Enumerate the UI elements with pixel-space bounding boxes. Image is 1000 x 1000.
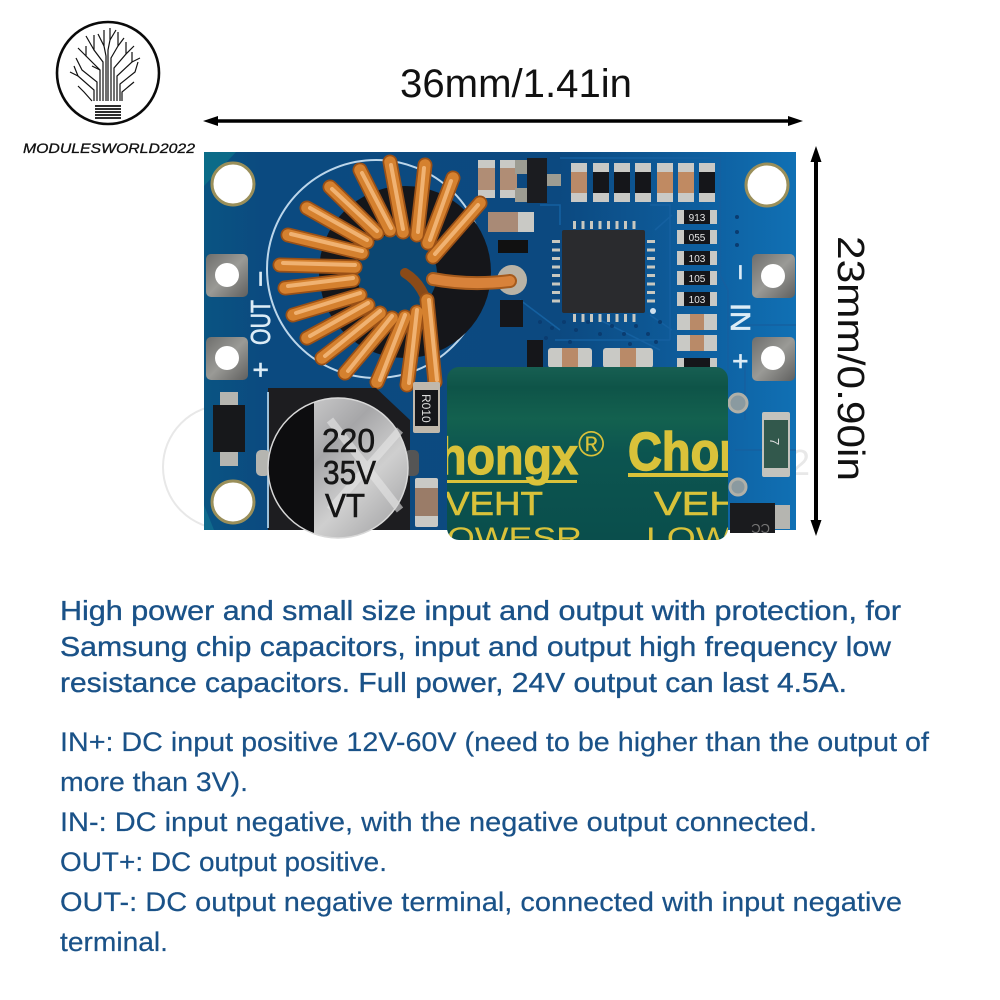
- pin descriptions: more than 3V).: [60, 767, 248, 797]
- top row components: [478, 158, 715, 253]
- R010 resistor: [413, 382, 440, 433]
- silkscreen labels: −: [245, 271, 276, 287]
- fuse: [762, 412, 790, 477]
- lower capacitors: [500, 300, 717, 368]
- silkscreen labels: −: [725, 264, 756, 280]
- traces: [520, 157, 796, 450]
- capacitor printing: VEH: [654, 485, 739, 522]
- controller chip: [556, 225, 656, 318]
- copper windings: [280, 162, 480, 385]
- resistor column: 913: [689, 213, 706, 224]
- capacitor markings: [322, 422, 376, 524]
- output capacitor base: [268, 388, 410, 530]
- small chip capacitor: [415, 478, 438, 527]
- resistor column: 103: [689, 295, 706, 306]
- circuit board photo: [204, 152, 796, 555]
- fuse: 7: [767, 438, 782, 445]
- dimension: width: [203, 62, 803, 126]
- capacitor markings: 220: [322, 422, 375, 459]
- pin descriptions: [60, 727, 930, 957]
- height arrow: [814, 158, 818, 524]
- resistor column: [677, 210, 717, 351]
- capacitor printing: LOW: [646, 522, 732, 555]
- pin descriptions: OUT-: DC output negative terminal, connected with input negative: [60, 887, 902, 917]
- pin descriptions: IN-: DC input negative, with the negative output connected.: [60, 807, 817, 837]
- diode left: [213, 392, 245, 466]
- description paragraph: Samsung chip capacitors, input and output high frequency low: [60, 631, 891, 662]
- width arrow: [216, 119, 790, 123]
- diode right: CC: [751, 521, 770, 536]
- silkscreen labels: +: [245, 362, 276, 378]
- silkscreen labels: OUT: [245, 300, 276, 345]
- resistor column: 103: [689, 254, 706, 265]
- pin descriptions: IN+: DC input positive 12V-60V (need to be higher than the output of: [60, 727, 930, 757]
- toroidal inductor: [280, 162, 527, 385]
- silkscreen labels: IN: [725, 303, 756, 332]
- description paragraph: [60, 595, 901, 698]
- wire lead: [405, 265, 527, 315]
- capacitor printing: [447, 430, 728, 540]
- R010 resistor: R010: [419, 394, 433, 423]
- silkscreen labels: +: [725, 353, 756, 369]
- input pads: [752, 254, 795, 381]
- watermark: 22: [770, 442, 810, 483]
- capacitor printing: Chon: [628, 422, 748, 482]
- pin descriptions: terminal.: [60, 927, 168, 957]
- pin descriptions: OUT+: DC output positive.: [60, 847, 387, 877]
- silkscreen labels: [245, 264, 756, 378]
- output pads: [206, 254, 248, 380]
- description paragraph: resistance capacitors. Full power, 24V output can last 4.5A.: [60, 667, 847, 698]
- dimension: height: [810, 146, 871, 536]
- width label: 36mm/1.41in: [400, 62, 632, 106]
- diode right: [730, 503, 790, 536]
- logo: [23, 22, 195, 156]
- board: [204, 152, 796, 530]
- logo wordmark: MODULESWORLD2022: [23, 141, 195, 156]
- capacitor printing: VEHT: [445, 485, 543, 522]
- watermark: [163, 405, 810, 529]
- resistor column: 105: [689, 274, 706, 285]
- description paragraph: High power and small size input and output with protection, for: [60, 595, 901, 626]
- capacitor printing: OWESR: [447, 522, 582, 555]
- height label: 23mm/0.90in: [829, 236, 871, 481]
- capacitor markings: VT: [325, 487, 365, 524]
- ferrite core: [319, 186, 491, 358]
- mounting holes: [212, 163, 788, 523]
- resistor column: 055: [689, 233, 706, 244]
- green electrolytic capacitor: [447, 367, 728, 540]
- plated vias: [729, 394, 747, 495]
- silkscreen ring: [267, 160, 485, 378]
- capacitor printing: hongx: [438, 428, 578, 486]
- capacitor markings: 35V: [323, 454, 376, 491]
- icon: circuit tree lightbulb: [70, 28, 140, 118]
- aluminium capacitor 220 35V: [267, 397, 409, 539]
- capacitor printing: ®: [578, 423, 605, 464]
